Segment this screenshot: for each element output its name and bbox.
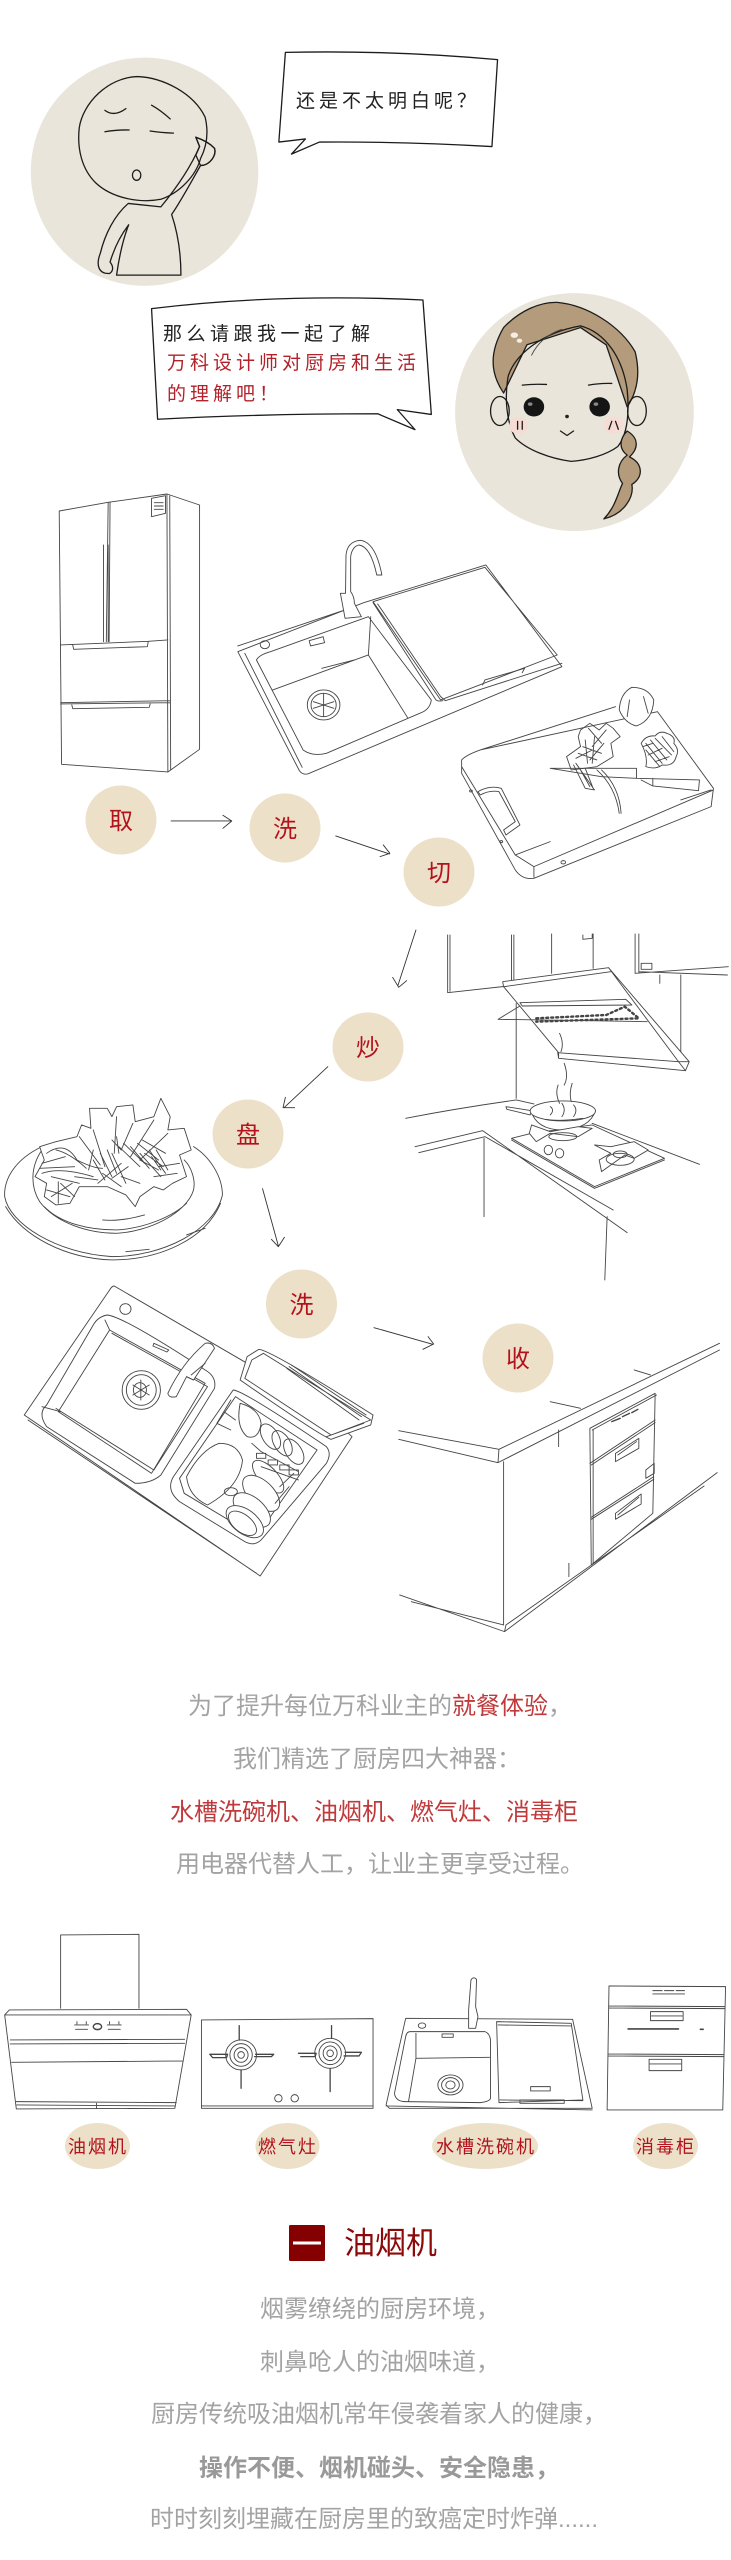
step: 洗: 洗 <box>273 816 297 843</box>
appliance: gas stove <box>201 2019 373 2108</box>
body text: range hood problems: 刺鼻呛人的油烟味道， <box>260 2349 500 2376</box>
body text: range hood problems <box>150 2296 607 2533</box>
illustration: plate of salad <box>5 1098 222 1260</box>
intro text: 用电器代替人工，让业主更享受过程。 <box>176 1851 584 1878</box>
step: 收 <box>482 1324 554 1392</box>
label: 油烟机 <box>65 2123 130 2169</box>
label: 油烟机: 油烟机 <box>68 2137 128 2157</box>
speech bubble: invitation: 万科设计师对厨房和生活 <box>167 352 420 374</box>
body text: range hood problems: 时时刻刻埋藏在厨房里的致癌定时炸弹...... <box>150 2506 598 2533</box>
body text: range hood problems: 烟雾缭绕的厨房环境， <box>260 2296 500 2323</box>
label: 燃气灶: 燃气灶 <box>258 2137 318 2157</box>
illustration: cutting board with vegetables and knife <box>462 687 713 879</box>
body text: range hood problems: 操作不便、烟机碰头、安全隐患， <box>199 2455 559 2482</box>
character: girl with braid in circle <box>455 293 694 531</box>
arrow: 洗 to 收 <box>374 1328 434 1349</box>
illustration: counter with disinfection cabinet <box>399 1343 720 1632</box>
appliance: range hood <box>5 1934 191 2109</box>
label: 消毒柜: 消毒柜 <box>636 2137 696 2157</box>
speech bubble: invitation <box>152 298 431 430</box>
arrow: 洗 to 切 <box>336 836 390 857</box>
speech bubble: question: 还是不太明白呢？ <box>296 90 480 112</box>
intro text: 水槽洗碗机、油烟机、燃气灶、消毒柜 <box>170 1799 578 1826</box>
intro text: 为了提升每位万科业主的就餐体验， <box>188 1693 572 1720</box>
arrow: 盘 to 洗 <box>263 1189 284 1247</box>
step: 取: 取 <box>109 808 133 835</box>
label: 消毒柜 <box>633 2123 698 2169</box>
illustration: refrigerator <box>59 494 200 772</box>
appliance: disinfection cabinet <box>607 1986 726 2110</box>
intro text <box>170 1693 584 1878</box>
label: 燃气灶 <box>256 2123 320 2169</box>
step: 取 <box>86 786 156 854</box>
illustration: range hood and stove scene <box>406 934 728 1280</box>
label: 水槽洗碗机 <box>432 2123 538 2169</box>
section heading: 一 油烟机: 油烟机 <box>344 2226 437 2261</box>
step: 收: 收 <box>506 1346 530 1373</box>
arrow: 炒 to 盘 <box>283 1067 328 1108</box>
speech bubble: invitation: 的理解吧！ <box>167 383 282 405</box>
step: 盘 <box>212 1100 284 1168</box>
arrow: 切 to 炒 <box>393 930 416 987</box>
intro text: 我们精选了厨房四大神器： <box>233 1746 521 1773</box>
section heading: 一 油烟机 <box>289 2225 437 2261</box>
body text: range hood problems: 厨房传统吸油烟机常年侵袭着家人的健康， <box>151 2401 607 2428</box>
character: thinking man in circle <box>31 58 258 286</box>
step: 洗 (dishes) <box>266 1270 337 1338</box>
step: 炒: 炒 <box>356 1035 380 1062</box>
step: 盘: 盘 <box>236 1122 260 1149</box>
step: 切 <box>404 838 474 906</box>
illustration: sink with dish rack <box>24 1286 373 1576</box>
step: 洗 <box>250 794 320 862</box>
arrow: 取 to 洗 <box>171 815 232 828</box>
speech bubble: invitation: 那么请跟我一起了解 <box>163 323 375 345</box>
speech bubble: question <box>279 52 498 154</box>
label: 水槽洗碗机: 水槽洗碗机 <box>436 2137 536 2157</box>
step: 洗 (dishes): 洗 <box>290 1292 314 1319</box>
illustration: sink with cover board <box>238 540 562 774</box>
step: 炒 <box>332 1012 404 1082</box>
step: 切: 切 <box>427 860 451 887</box>
appliance: sink dishwasher <box>386 1978 592 2110</box>
